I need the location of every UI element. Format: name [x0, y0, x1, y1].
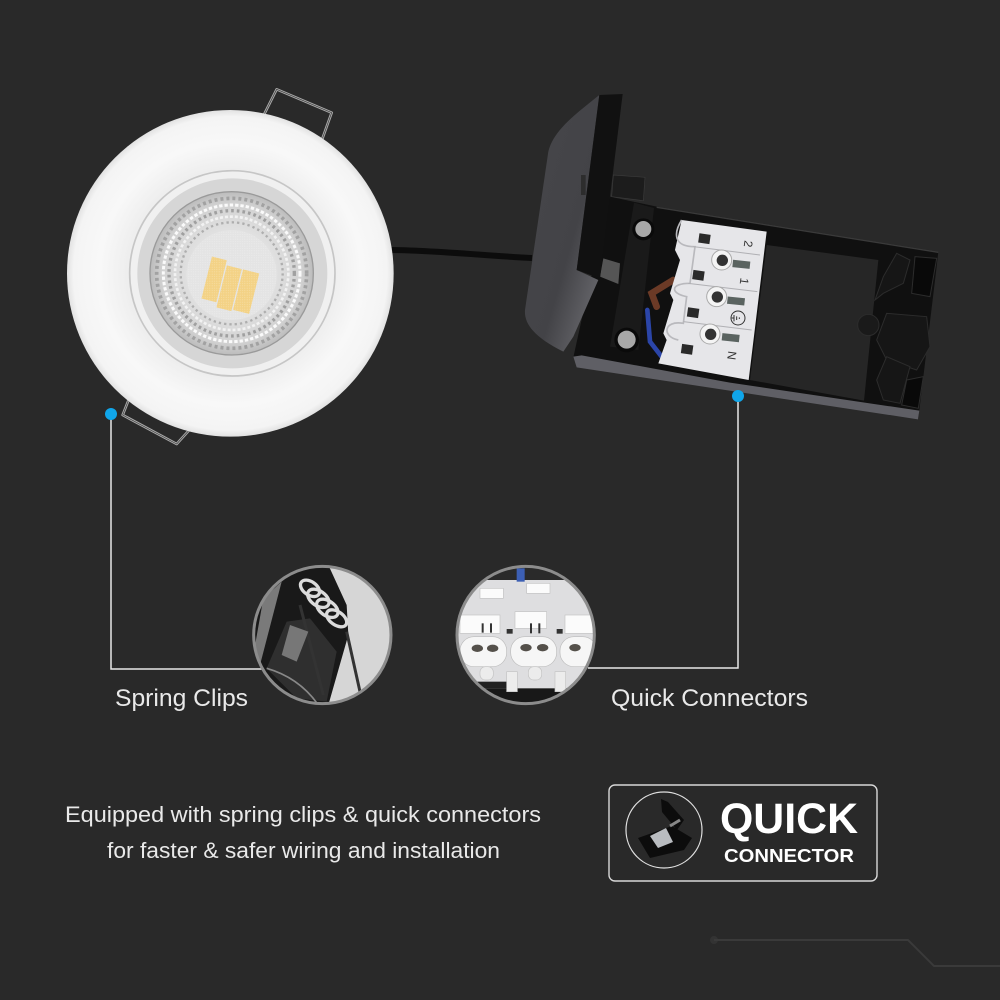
LED chip — [200, 257, 260, 315]
decorative circuit line — [710, 936, 1000, 966]
mounting screws — [614, 218, 654, 352]
lens centre — [187, 230, 277, 320]
screw bracket — [610, 203, 654, 350]
spring clip wires — [123, 89, 332, 444]
front wall — [573, 355, 919, 419]
terminal labels — [724, 240, 756, 361]
terminal labels: 1 — [737, 277, 752, 286]
junction box — [525, 94, 938, 419]
white trim ring — [67, 110, 394, 437]
upper levers — [460, 583, 595, 633]
lever marks — [681, 233, 711, 355]
badge title: QUICK — [720, 795, 858, 843]
callout: quick connectors lead line — [588, 390, 744, 668]
downlight fixture — [67, 89, 394, 444]
spring coil — [298, 578, 348, 628]
box body — [573, 197, 938, 418]
open lid — [525, 94, 623, 352]
detail circle: spring clips — [253, 565, 397, 705]
badge: quick connector — [609, 785, 877, 881]
description text — [65, 802, 541, 863]
lid tab — [612, 175, 645, 201]
lens housing — [130, 171, 335, 376]
description text: Equipped with spring clips & quick connectors — [65, 802, 541, 827]
lens dot overlay — [187, 230, 277, 320]
badge frame — [609, 785, 877, 881]
contact windows — [722, 260, 750, 342]
callout: spring clips lead line — [105, 408, 262, 669]
lens scallop texture — [157, 198, 307, 348]
terminal labels: 2 — [741, 240, 756, 248]
pale background wedge — [329, 568, 390, 702]
wire entries — [472, 644, 581, 652]
detail circle: quick connectors — [457, 565, 597, 705]
earth symbol — [731, 311, 745, 325]
terminal labels: N — [724, 350, 739, 361]
badge icon — [626, 792, 702, 868]
white connector block — [658, 220, 767, 380]
scalloped left edge — [667, 220, 695, 340]
badge subtitle: CONNECTOR — [724, 846, 854, 866]
description text: for faster & safer wiring and installation — [107, 838, 500, 863]
grey cable grommet — [600, 258, 620, 284]
moulded clip end — [858, 253, 937, 408]
label: Quick Connectors: Quick Connectors — [611, 685, 808, 712]
box top rim — [657, 207, 938, 252]
push-in holes — [700, 250, 732, 344]
power cable — [390, 250, 532, 258]
wires — [647, 280, 673, 357]
label: Spring Clips: Spring Clips — [115, 685, 248, 712]
lower black base — [485, 688, 567, 702]
connector bodies — [460, 637, 597, 667]
dark slots — [482, 623, 563, 634]
box floor — [750, 245, 878, 401]
bottom tabs — [480, 667, 566, 692]
